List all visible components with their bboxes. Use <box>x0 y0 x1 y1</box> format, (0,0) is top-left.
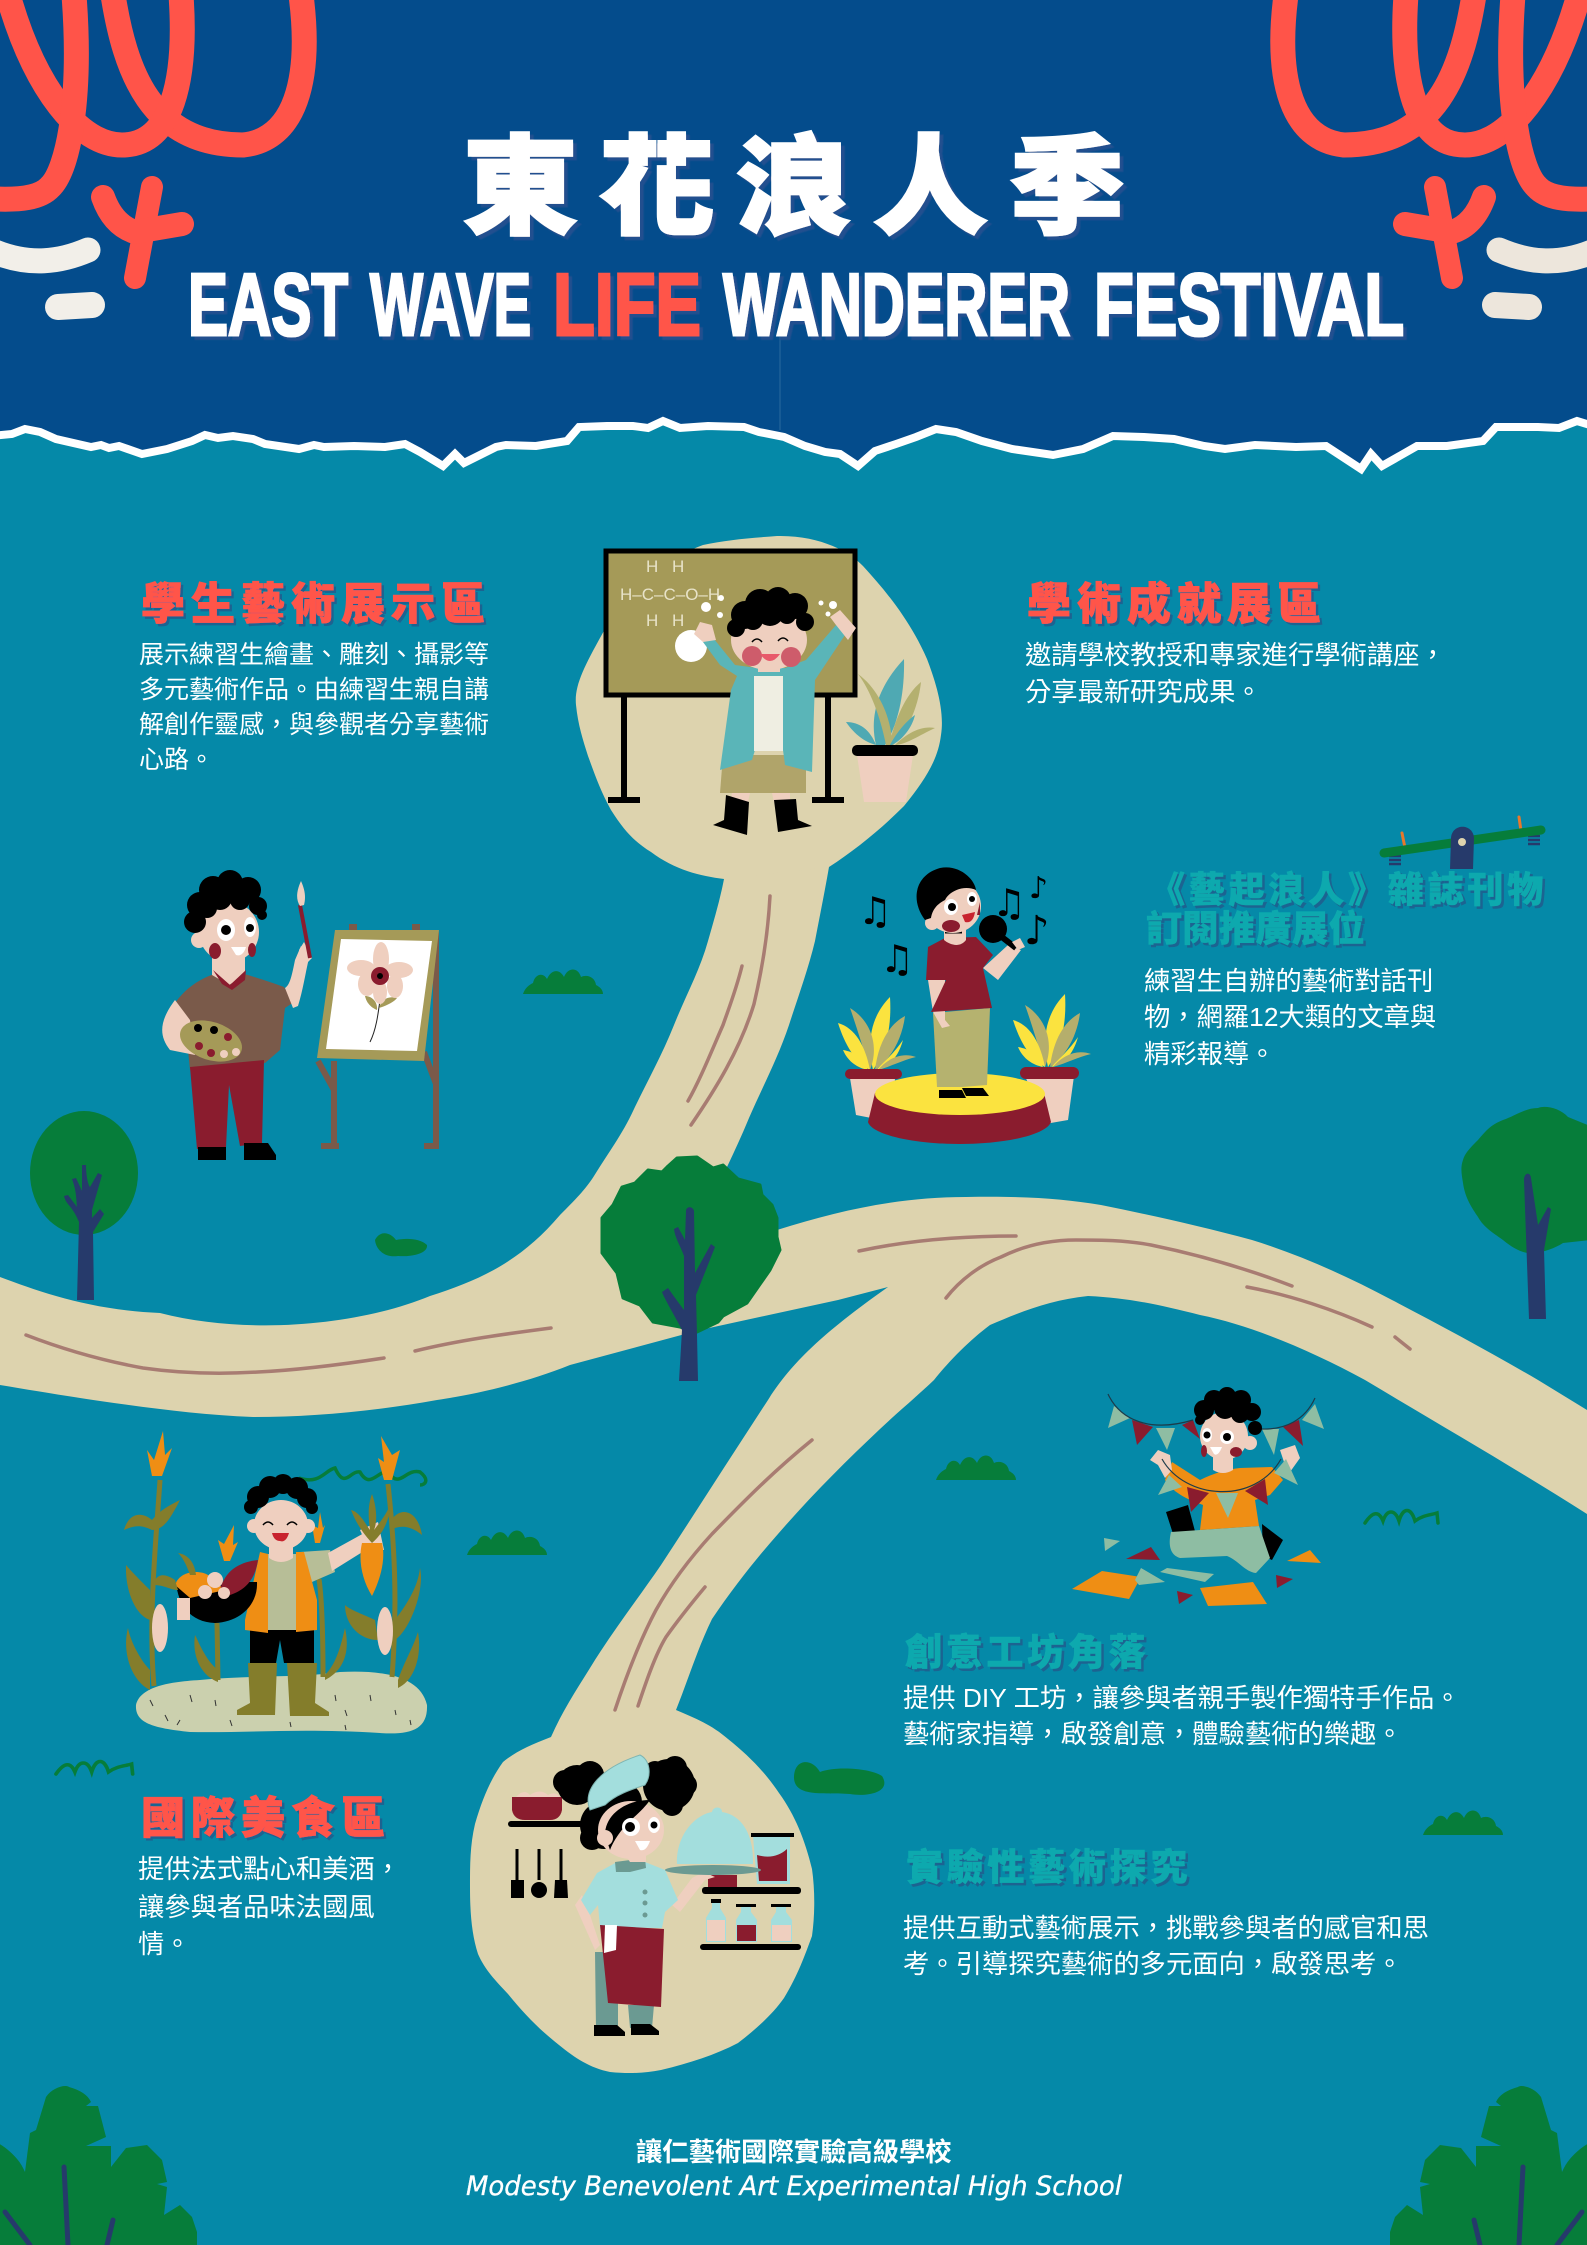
tree: right <box>1461 1107 1587 1319</box>
title: English: LIFE <box>553 255 701 354</box>
text: student art: 解創作靈感，與參觀者分享藝術 <box>139 711 489 739</box>
illustration: singer on stage: ♫ <box>858 889 892 933</box>
text: workshop: 提供 DIY 工坊，讓參與者親手製作獨特手作品。 <box>903 1683 1461 1713</box>
illustration: singer on stage: ♫ <box>992 881 1026 925</box>
title: English: EAST <box>188 255 348 354</box>
illustration: farmer in corn field <box>124 1431 427 1733</box>
illustration: singer on stage <box>838 867 1091 1144</box>
illustration: scientist at board: H–C–C–O–H <box>620 585 720 604</box>
leaves: bottom left <box>0 2086 197 2245</box>
icon: seesaw <box>1384 817 1541 869</box>
text: workshop <box>903 1683 1461 1749</box>
text: student art: 展示練習生繪畫、雕刻、攝影等 <box>139 641 489 669</box>
title: English: WANDERER <box>723 255 1070 354</box>
illustration: crafter with bunting <box>1072 1387 1324 1606</box>
illustration: scientist at board: H <box>672 611 684 630</box>
heading: magazine <box>1146 869 1547 949</box>
illustration: singer on stage: ♪ <box>1029 871 1048 906</box>
illustration: scientist at board: H <box>646 557 658 576</box>
tree: centre <box>602 1157 780 1381</box>
illustration: singer on stage: ♪ <box>1024 908 1050 954</box>
heading: magazine: 《藝起浪人》雜誌刊物 <box>1149 869 1547 910</box>
road network <box>0 850 1587 1755</box>
text: magazine: 練習生自辦的藝術對話刊 <box>1144 966 1433 996</box>
text: food: 提供法式點心和美酒， <box>138 1854 401 1884</box>
blob: top stage <box>576 536 942 879</box>
title: English <box>188 255 1404 354</box>
text: magazine <box>1144 966 1436 1069</box>
text: magazine: 物，網羅12大類的文章與 <box>1144 1002 1436 1032</box>
text: workshop: 藝術家指導，啟發創意，體驗藝術的樂趣。 <box>903 1719 1403 1749</box>
text: student art: 心路。 <box>139 746 214 774</box>
text: academic: 分享最新研究成果。 <box>1025 677 1262 707</box>
decoration: right red swirls <box>1283 0 1587 307</box>
decoration: left red swirls <box>0 0 304 307</box>
text: student art: 多元藝術作品。由練習生親自講 <box>139 676 489 704</box>
text: food: 情。 <box>138 1929 191 1959</box>
tree: left <box>30 1111 138 1300</box>
text: experimental: 提供互動式藝術展示，挑戰參與者的感官和思 <box>903 1913 1429 1943</box>
bushes <box>375 970 1503 1835</box>
illustration: chef <box>508 1755 801 2036</box>
heading: workshop: 創意工坊角落 <box>905 1631 1149 1673</box>
illustration: scientist at board: H <box>672 557 684 576</box>
footer: school name English: Modesty Benevolent Art Experimental High School <box>466 2171 1122 2202</box>
text: student art <box>139 641 489 774</box>
text: food <box>138 1854 401 1959</box>
illustration: scientist at board: H <box>646 611 658 630</box>
text: academic: 邀請學校教授和專家進行學術講座， <box>1025 640 1446 670</box>
heading: student art: 學生藝術展示區 <box>141 580 491 629</box>
text: experimental <box>903 1913 1429 1979</box>
illustration: painter at easel <box>162 870 439 1160</box>
title: Chinese: 東花浪人季 <box>463 127 1147 248</box>
grass squiggles <box>56 1468 1438 1774</box>
text: experimental: 考。引導探究藝術的多元面向，啟發思考。 <box>903 1949 1403 1979</box>
footer: school name Chinese: 讓仁藝術國際實驗高級學校 <box>636 2137 952 2167</box>
title: English: WAVE <box>370 255 531 354</box>
heading: magazine: 訂閱推廣展位 <box>1146 908 1365 949</box>
road stripes <box>26 896 1410 1710</box>
title: English: FESTIVAL <box>1094 255 1404 354</box>
text: magazine: 精彩報導。 <box>1144 1039 1275 1069</box>
text: academic <box>1025 640 1446 707</box>
heading: academic: 學術成就展區 <box>1027 579 1327 629</box>
text: food: 讓參與者品味法國風 <box>138 1892 375 1922</box>
leaves: bottom right <box>1390 2086 1587 2245</box>
illustration: singer on stage: ♫ <box>880 937 914 981</box>
blob: bottom stage <box>470 1710 814 2073</box>
heading: food: 國際美食區 <box>141 1793 391 1843</box>
illustration: scientist at board <box>606 551 935 835</box>
heading: experimental: 實驗性藝術探究 <box>906 1846 1191 1888</box>
